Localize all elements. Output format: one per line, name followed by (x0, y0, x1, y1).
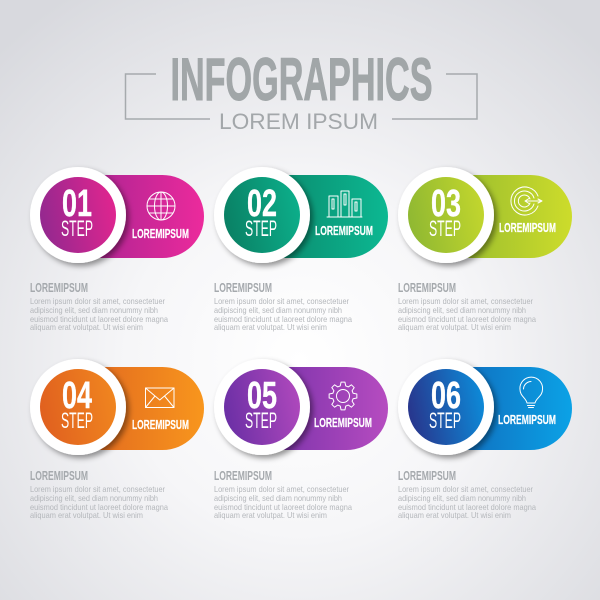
circle 06 (398, 359, 494, 455)
circle 03 (398, 167, 494, 263)
circle 04 (30, 359, 126, 455)
text block 04: LOREMIPSUM (30, 469, 88, 483)
text block 02: euismod tincidunt ut laoreet dolore magna (214, 314, 352, 324)
text block 05: euismod tincidunt ut laoreet dolore magna (214, 502, 352, 512)
text block 01: aliquam erat volutpat. Ut wisi enim (30, 322, 143, 332)
step word: STEP (429, 216, 461, 241)
text block 04: Lorem ipsum dolor sit amet, consectetuer (30, 484, 165, 494)
step 04 card (30, 359, 204, 520)
pill 03 (428, 175, 572, 258)
text block 05: aliquam erat volutpat. Ut wisi enim (214, 510, 327, 520)
step word: STEP (61, 408, 93, 433)
pill 06 (428, 367, 572, 450)
label 02: LOREMIPSUM (315, 223, 373, 238)
text block 04 (30, 469, 168, 520)
step 06 card (398, 359, 572, 520)
title bracket (126, 74, 477, 119)
pill 01 (60, 175, 204, 258)
label 06: LOREMIPSUM (498, 412, 556, 427)
text block 04: adipiscing elit, sed diam nonummy nibh (30, 493, 158, 503)
icon: gear (329, 382, 357, 410)
number 05: 05 (247, 375, 277, 417)
text block 06: aliquam erat volutpat. Ut wisi enim (398, 510, 511, 520)
step word: STEP (429, 408, 461, 433)
text block 06: LOREMIPSUM (398, 469, 456, 483)
text block 02: LOREMIPSUM (214, 281, 272, 295)
label 01: LOREMIPSUM (132, 226, 189, 241)
icon: envelope (146, 388, 174, 408)
step word: STEP (245, 408, 277, 433)
text block 06: Lorem ipsum dolor sit amet, consectetuer (398, 484, 533, 494)
text block 01: euismod tincidunt ut laoreet dolore magna (30, 314, 168, 324)
text block 02: aliquam erat volutpat. Ut wisi enim (214, 322, 327, 332)
step 01 card (30, 167, 204, 332)
circle 05 (214, 359, 310, 455)
step 05 card (214, 359, 388, 520)
subtitle: LOREM IPSUM (219, 109, 378, 134)
text block 02: adipiscing elit, sed diam nonummy nibh (214, 305, 342, 315)
text block 03 (398, 281, 536, 332)
number 03: 03 (431, 183, 461, 225)
text block 05 (214, 469, 352, 520)
step 02 card (214, 167, 388, 332)
text block 03: adipiscing elit, sed diam nonummy nibh (398, 305, 526, 315)
text block 06 (398, 469, 536, 520)
icon: light bulb (520, 377, 543, 408)
text block 04: aliquam erat volutpat. Ut wisi enim (30, 510, 143, 520)
text block 05: Lorem ipsum dolor sit amet, consectetuer (214, 484, 349, 494)
text block 03: aliquam erat volutpat. Ut wisi enim (398, 322, 511, 332)
number 02: 02 (247, 183, 277, 225)
step word: STEP (245, 216, 277, 241)
pill 05 (244, 367, 388, 450)
pill 04 (60, 367, 204, 450)
text block 03: Lorem ipsum dolor sit amet, consectetuer (398, 296, 533, 306)
number 01: 01 (62, 183, 92, 225)
number 04: 04 (62, 375, 92, 417)
text block 02: Lorem ipsum dolor sit amet, consectetuer (214, 296, 349, 306)
text block 03: euismod tincidunt ut laoreet dolore magna (398, 314, 536, 324)
circle 02 (214, 167, 310, 263)
icon: buildings (327, 191, 362, 217)
pill 02 (244, 175, 388, 258)
text block 01 (30, 281, 168, 332)
step 03 card (398, 167, 572, 332)
label 04: LOREMIPSUM (132, 417, 189, 432)
number 06: 06 (431, 375, 461, 417)
circle 01 (30, 167, 126, 263)
label 03: LOREMIPSUM (499, 220, 556, 235)
text block 01: LOREMIPSUM (30, 281, 88, 295)
text block 06: adipiscing elit, sed diam nonummy nibh (398, 493, 526, 503)
text block 01: adipiscing elit, sed diam nonummy nibh (30, 305, 158, 315)
text block 03: LOREMIPSUM (398, 281, 456, 295)
text block 02 (214, 281, 352, 332)
text block 01: Lorem ipsum dolor sit amet, consectetuer (30, 296, 165, 306)
label 05: LOREMIPSUM (314, 415, 372, 430)
text block 06: euismod tincidunt ut laoreet dolore magna (398, 502, 536, 512)
text block 05: adipiscing elit, sed diam nonummy nibh (214, 493, 342, 503)
icon: target (511, 187, 542, 215)
text block 05: LOREMIPSUM (214, 469, 272, 483)
text block 04: euismod tincidunt ut laoreet dolore magna (30, 502, 168, 512)
icon: globe (147, 192, 175, 220)
step word: STEP (61, 216, 93, 241)
